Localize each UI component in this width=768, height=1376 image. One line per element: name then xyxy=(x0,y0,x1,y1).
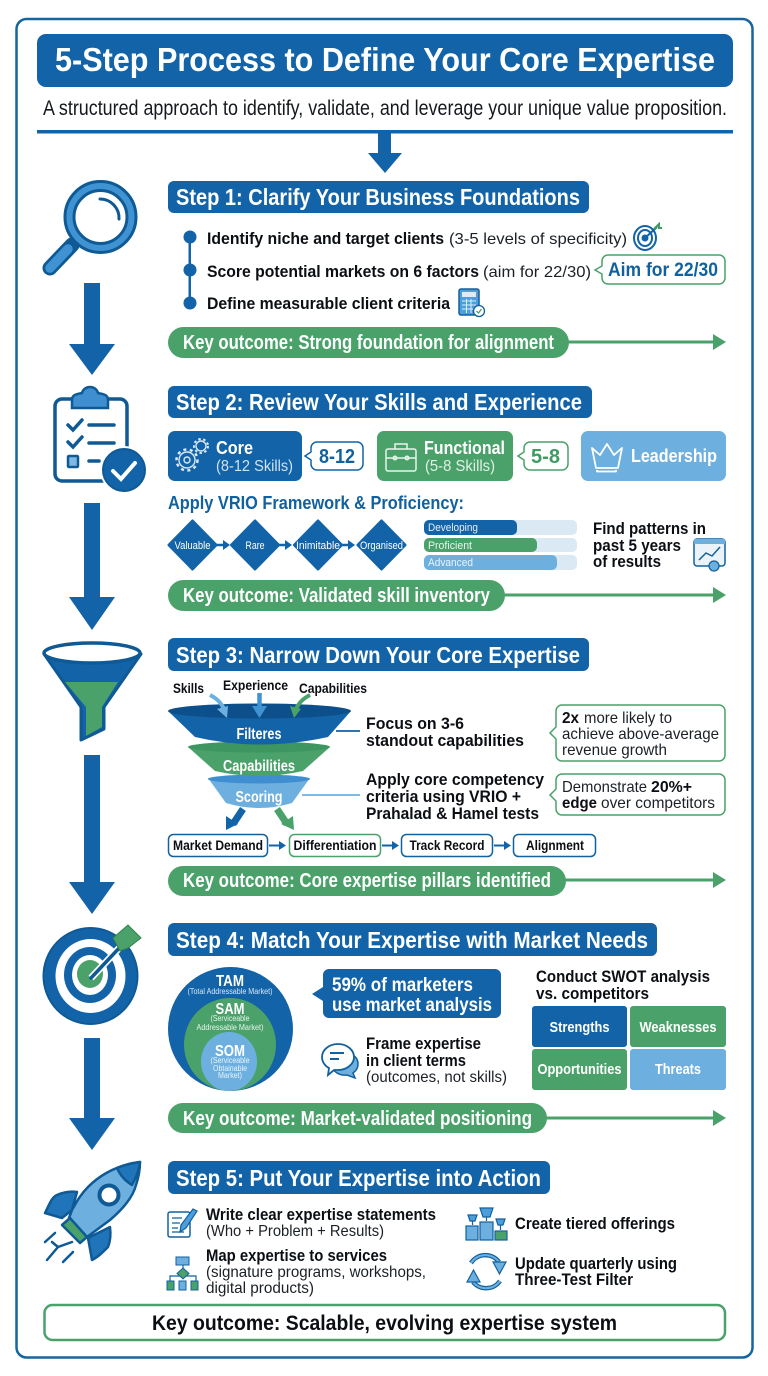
icon: magnifying glass xyxy=(50,182,136,268)
diagram: TAM SAM SOM xyxy=(168,967,293,1091)
icon: service map xyxy=(167,1257,198,1290)
icon: pen and note xyxy=(168,1209,197,1237)
callout: 20% edge: over competitors xyxy=(601,795,715,812)
callout: 2x more likely: 2x xyxy=(562,710,579,727)
icon: small target xyxy=(634,224,662,250)
card: core: Core xyxy=(216,438,253,458)
diagram: TAM SAM SOM: (Total Addressable Market) xyxy=(188,987,273,996)
text: expertise statements: Write clear expertise statements xyxy=(206,1206,436,1224)
connector lines xyxy=(302,731,360,795)
arrow: step 1 to step 2 xyxy=(69,283,115,375)
callout: aim for 22/30: Aim for 22/30 xyxy=(608,260,718,281)
text: frame expertise: Frame expertise xyxy=(366,1034,481,1053)
card: functional: (5-8 Skills) xyxy=(425,458,495,475)
diagram: VRIO diamonds: Rare xyxy=(246,540,264,552)
callout: 20% edge: Demonstrate xyxy=(562,779,647,796)
step 5 heading: Step 5: Put Your Expertise into Action xyxy=(176,1165,541,1191)
text: frame expertise xyxy=(366,1034,507,1086)
text: focus on capabilities: standout capabilities xyxy=(366,731,524,750)
funnel layer: filters: Filteres xyxy=(236,726,282,743)
arrow: step 2 to step 3 xyxy=(69,503,115,630)
callout: 59% of marketers: 59% of marketers xyxy=(332,975,473,996)
key outcome: final xyxy=(44,1305,725,1340)
icon: rocket xyxy=(45,1162,140,1262)
chart: SWOT grid xyxy=(532,1006,726,1090)
text: expertise statements xyxy=(206,1206,436,1240)
text: update quarterly: Three-Test Filter xyxy=(515,1271,634,1289)
funnel output arrows xyxy=(226,809,294,830)
key outcome: step 2: Key outcome: Validated skill inventory xyxy=(183,585,491,607)
process: criteria boxes: Alignment xyxy=(526,837,584,853)
step 2 heading: Step 2: Review Your Skills and Experience xyxy=(176,389,582,415)
panel: step 2 xyxy=(168,386,726,611)
callout: 2x more likely xyxy=(550,705,725,761)
funnel layer: scoring: Scoring xyxy=(236,789,282,806)
title banner: 5-Step Process to Define Your Core Expertise xyxy=(55,41,715,78)
diagram: TAM SAM SOM: Addressable Market) xyxy=(196,1023,264,1032)
step 4 heading: Step 4: Match Your Expertise with Market Needs xyxy=(176,927,648,953)
step 1 heading: Step 1: Clarify Your Business Foundations xyxy=(176,184,580,210)
callout: 8-12 xyxy=(305,442,363,470)
callout: 2x more likely: revenue growth xyxy=(562,742,667,759)
key outcome: final: Key outcome: Scalable, evolving expertise system xyxy=(152,1312,617,1335)
text: expertise statements: (Who + Problem + Results) xyxy=(206,1223,384,1240)
panel: step 4 xyxy=(168,923,726,1133)
funnel layer: capabilities: Capabilities xyxy=(223,758,295,775)
chart: SWOT grid: Opportunities xyxy=(538,1061,622,1078)
text: update quarterly: Update quarterly using xyxy=(515,1255,677,1273)
key outcome: step 4: Key outcome: Market-validated positioning xyxy=(183,1108,532,1130)
card: functional: Functional xyxy=(424,438,505,458)
text: core competency criteria: criteria using VRIO + xyxy=(366,787,521,806)
diagram: TAM SAM SOM: SAM xyxy=(216,1001,244,1018)
diagram: TAM SAM SOM: (Serviceable xyxy=(210,1056,250,1065)
text: core competency criteria: Apply core competency xyxy=(366,770,545,789)
funnel layer: filters xyxy=(168,704,351,744)
process: criteria boxes: Track Record xyxy=(410,837,484,853)
card: leadership: Leadership xyxy=(631,446,717,466)
bullet: identify niche: (3-5 levels of specificity) xyxy=(449,231,627,248)
subheading: VRIO: Apply VRIO Framework & Proficiency: xyxy=(168,493,464,513)
text: find patterns xyxy=(593,519,706,571)
text: core competency criteria: Prahalad & Hamel tests xyxy=(366,804,539,823)
text: frame expertise: in client terms xyxy=(366,1051,466,1070)
text: SWOT heading xyxy=(536,967,710,1003)
callout: 2x more likely: more likely to xyxy=(584,710,672,727)
icon: refresh cycle xyxy=(467,1255,506,1288)
diagram: TAM SAM SOM: Obtainable xyxy=(213,1064,247,1073)
icon: calculator xyxy=(459,289,484,316)
diagram: VRIO diamonds: Inimitable xyxy=(296,540,340,552)
diagram: TAM SAM SOM: (Serviceable xyxy=(210,1014,250,1023)
funnel input labels: Experience xyxy=(223,677,288,693)
text: map expertise xyxy=(206,1247,426,1297)
bullet: define criteria: Define measurable client criteria xyxy=(207,294,450,313)
key outcome: step 2 xyxy=(168,580,726,611)
text: find patterns: past 5 years xyxy=(593,536,681,555)
text: update quarterly xyxy=(515,1255,677,1289)
text: core competency criteria xyxy=(366,770,545,823)
callout: 2x more likely: achieve above-average xyxy=(562,726,719,743)
chart: proficiency bars: Proficient xyxy=(428,540,472,552)
title banner xyxy=(37,34,733,87)
bullet: score markets: Score potential markets on 6 factors xyxy=(207,262,479,281)
chart: SWOT grid: Weaknesses xyxy=(640,1019,716,1036)
bullet: identify niche xyxy=(207,229,627,248)
key outcome: step 3 xyxy=(168,866,726,896)
diagram: VRIO diamonds: Organised xyxy=(360,540,403,552)
chart: SWOT grid: Strengths xyxy=(550,1019,610,1036)
card: core xyxy=(168,431,302,481)
diagram: TAM SAM SOM: TAM xyxy=(216,973,244,990)
step 3 heading: Step 3: Narrow Down Your Core Expertise xyxy=(176,642,580,668)
chart: proficiency bars xyxy=(424,520,577,570)
diagram: VRIO diamonds: Valuable xyxy=(174,540,210,552)
text: focus on capabilities xyxy=(366,714,524,750)
icon: chart window xyxy=(694,539,725,571)
text: find patterns: Find patterns in xyxy=(593,519,706,538)
text: map expertise: digital products) xyxy=(206,1280,314,1297)
funnel input labels: Capabilities xyxy=(299,680,367,696)
chart: SWOT grid: Threats xyxy=(655,1061,701,1078)
callout: 5-8: 5-8 xyxy=(531,446,560,468)
text: tiered offerings: Create tiered offerings xyxy=(515,1215,675,1233)
funnel layer: capabilities xyxy=(188,742,330,776)
text: map expertise: (signature programs, workshops, xyxy=(206,1264,426,1281)
key outcome: step 3: Key outcome: Core expertise pillars identified xyxy=(183,870,551,892)
text: SWOT heading: Conduct SWOT analysis xyxy=(536,967,710,986)
callout: 59% of marketers: use market analysis xyxy=(332,995,492,1016)
process: criteria boxes: Differentiation xyxy=(294,837,376,853)
arrow: step 3 to step 4 xyxy=(69,755,115,914)
text: find patterns: of results xyxy=(593,552,661,571)
icon: target with arrow xyxy=(44,925,141,1024)
chart: proficiency bars: Developing xyxy=(428,522,478,534)
callout: aim for 22/30 xyxy=(595,255,725,284)
funnel input arrows xyxy=(210,693,310,718)
panel: step 1 xyxy=(168,181,726,358)
process: criteria boxes: Market Demand xyxy=(173,837,263,853)
callout: 8-12: 8-12 xyxy=(319,446,355,468)
panel: step 3 xyxy=(168,638,726,896)
step 1 timeline xyxy=(184,230,196,310)
callout: 59% of marketers xyxy=(312,969,501,1018)
funnel input labels xyxy=(173,677,367,696)
text: frame expertise: (outcomes, not skills) xyxy=(366,1069,507,1086)
callout: 20% edge xyxy=(550,774,725,815)
text: map expertise: Map expertise to services xyxy=(206,1247,387,1265)
icon: speech bubbles xyxy=(322,1044,358,1078)
header rule xyxy=(37,130,733,134)
text: focus on capabilities: Focus on 3-6 xyxy=(366,714,464,733)
panel: step 5 xyxy=(44,1161,725,1340)
process: criteria boxes xyxy=(168,834,596,856)
text: SWOT heading: vs. competitors xyxy=(536,984,649,1003)
key outcome: step 4 xyxy=(168,1103,726,1133)
arrow: step 4 to step 5 xyxy=(69,1038,115,1150)
diagram: VRIO diamonds xyxy=(169,521,405,569)
diagram: TAM SAM SOM: SOM xyxy=(215,1043,245,1060)
diagram: TAM SAM SOM: Market) xyxy=(218,1071,242,1080)
funnel layer: scoring xyxy=(208,774,310,808)
card: leadership xyxy=(581,431,726,481)
callout: 20% edge: 20%+ xyxy=(651,779,692,796)
icon: funnel xyxy=(44,643,141,740)
icon: clipboard checklist xyxy=(55,387,148,494)
card: core: (8-12 Skills) xyxy=(216,458,293,475)
key outcome: step 1: Key outcome: Strong foundation for alignment xyxy=(183,332,554,354)
icon: podium trophies xyxy=(466,1208,507,1240)
callout: 20% edge: edge xyxy=(562,795,597,812)
arrow: header to steps xyxy=(368,133,402,173)
funnel input labels: Skills xyxy=(173,680,204,696)
funnel diagram xyxy=(168,677,367,830)
card: functional xyxy=(377,431,513,481)
bullet: score markets: (aim for 22/30) xyxy=(483,264,591,281)
key outcome: step 1 xyxy=(168,327,726,358)
bullet: identify niche: Identify niche and target clients xyxy=(207,229,444,248)
chart: proficiency bars: Advanced xyxy=(428,557,473,569)
callout: 5-8 xyxy=(518,442,568,470)
